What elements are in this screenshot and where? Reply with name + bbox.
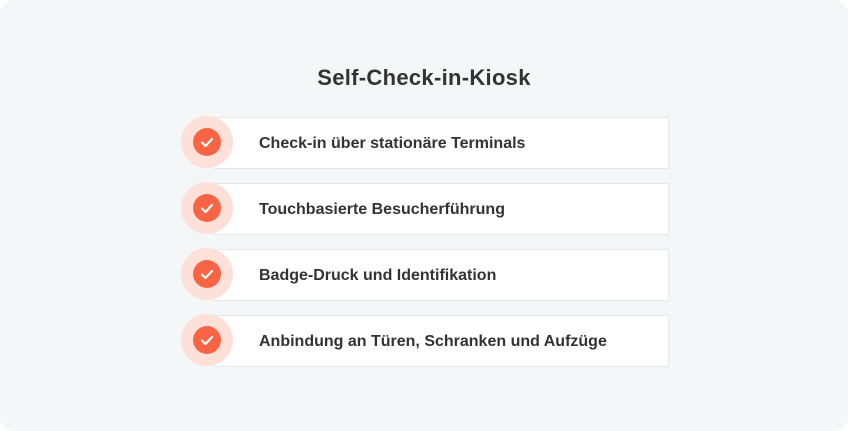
item 3 xyxy=(181,248,669,301)
icon: check badge xyxy=(181,314,233,366)
item 4: Anbindung an Türen, Schranken und Aufzüge xyxy=(259,333,607,350)
icon: check badge xyxy=(181,248,233,300)
title: Self-Check-in-Kiosk xyxy=(317,65,531,90)
item 4 xyxy=(181,314,669,367)
item 1 xyxy=(181,116,669,169)
icon: check badge xyxy=(181,116,233,168)
item 2 xyxy=(181,182,669,235)
item 3: Badge-Druck und Identifikation xyxy=(259,267,496,284)
item 2: Touchbasierte Besucherführung xyxy=(259,201,505,218)
icon: check badge xyxy=(181,182,233,234)
item 1: Check-in über stationäre Terminals xyxy=(259,135,525,152)
